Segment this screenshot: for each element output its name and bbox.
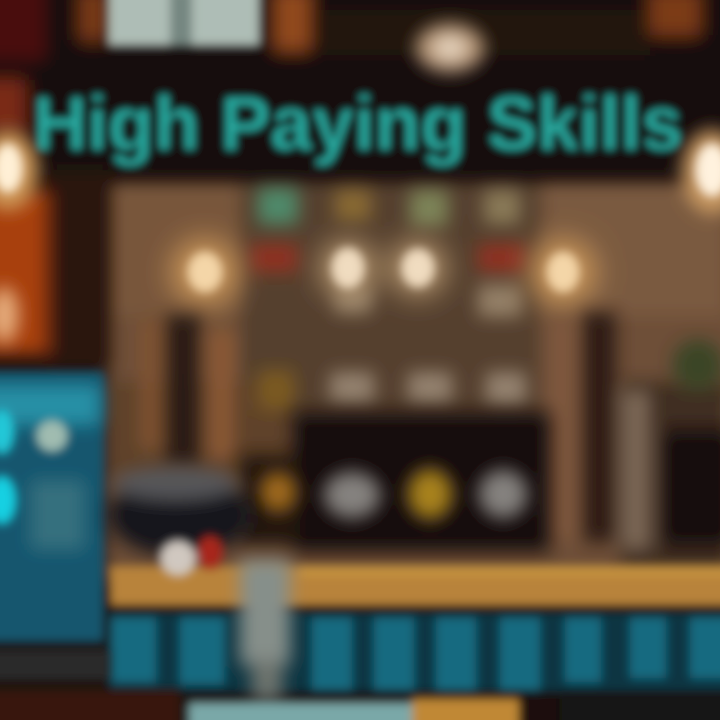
machine dials (260, 469, 527, 519)
panel: black coffee machine (240, 412, 550, 552)
title: blurred neon heading: High Paying Skills (33, 81, 683, 167)
panel: ceiling (0, 0, 720, 175)
panel: left orange pillar (0, 170, 108, 370)
shelf items row (250, 188, 526, 410)
icon: ceiling lamp (416, 24, 484, 72)
window in ceiling (108, 0, 260, 46)
icon: glass bottle in foreground (240, 560, 290, 700)
panel: foreground dark table (108, 467, 252, 557)
icon: left and right wall lights (0, 130, 720, 343)
dark side shelves (140, 312, 720, 550)
icon: red and white cup (160, 535, 223, 576)
panel: back wall (105, 180, 720, 580)
icon: row of hanging wall lamps (171, 238, 597, 306)
panel: bottom tabletop (0, 650, 720, 720)
panel: blue screen on left (0, 372, 104, 642)
panel: teal striped counter front (108, 612, 720, 692)
panel: wooden counter (110, 566, 720, 606)
